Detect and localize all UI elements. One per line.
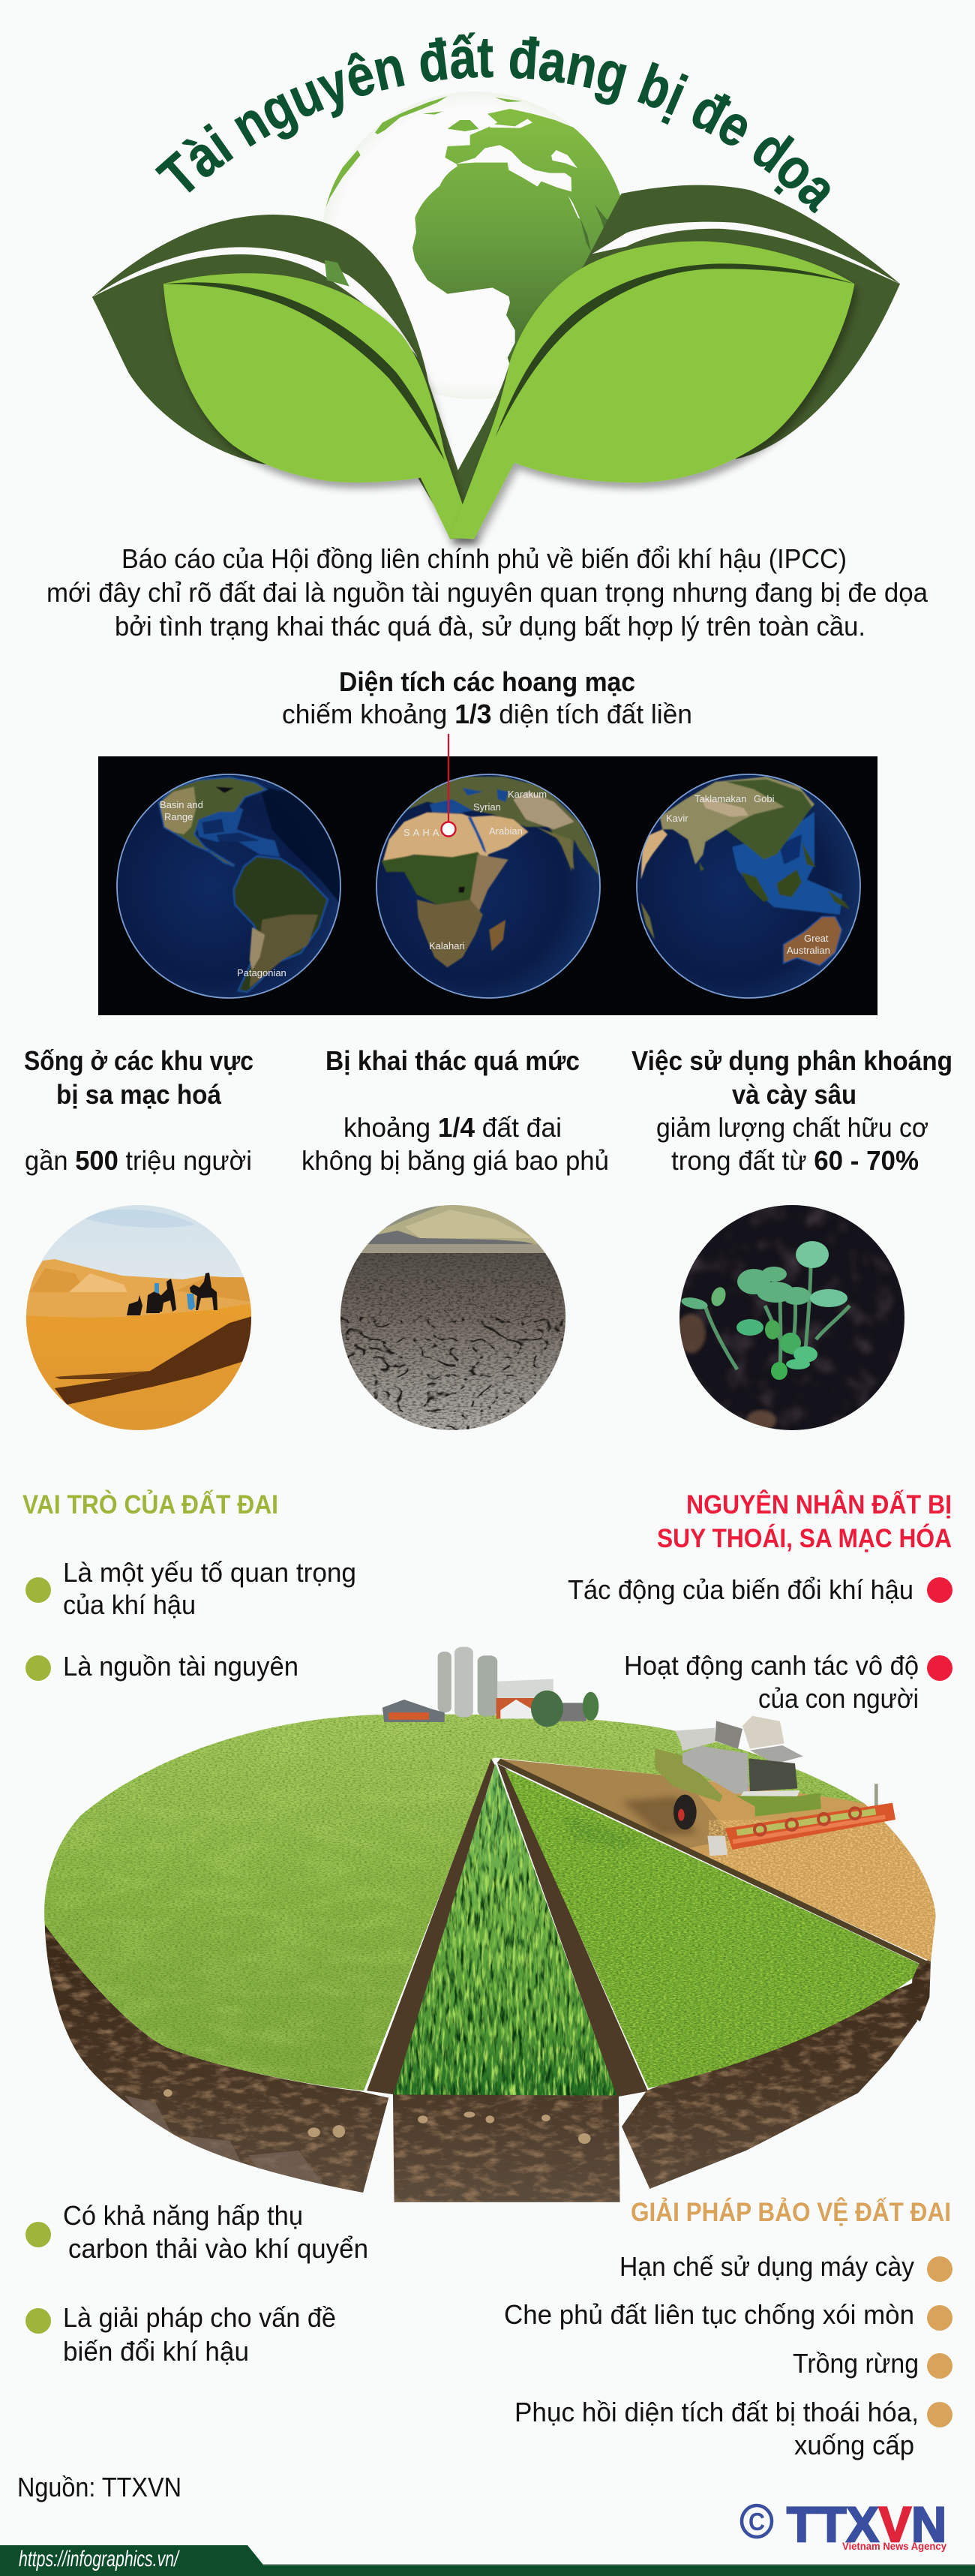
photo: cracked dry earth bbox=[338, 1201, 570, 1433]
globe labels: Kavir bbox=[666, 813, 688, 824]
heading: role of land: VAI TRÒ CỦA ĐẤT ĐAI bbox=[22, 1489, 278, 1519]
logo: TTXVN: C bbox=[748, 2508, 765, 2535]
column: fertilizer and deep ploughing: giảm lượng chất hữu cơ bbox=[656, 1112, 928, 1143]
globe labels: Kalahari bbox=[429, 940, 465, 951]
list: solutions: Hạn chế sử dụng máy cày bbox=[620, 2251, 914, 2282]
intro text block: Báo cáo của Hội đồng liên chính phủ về biến đổi khí hậu (IPCC) bbox=[122, 543, 847, 574]
wedge dividers bbox=[367, 1759, 648, 2097]
globe labels: Range bbox=[164, 811, 193, 822]
column: overexploited: Bị khai thác quá mức bbox=[326, 1045, 580, 1076]
leaf pair bbox=[92, 185, 900, 539]
tan sector edge bbox=[499, 1761, 926, 1964]
globe labels: Patagonian bbox=[237, 967, 286, 978]
globe: Americas bbox=[117, 774, 340, 998]
intro text block bbox=[46, 543, 928, 642]
list: causes: Tác động của biến đổi khí hậu bbox=[568, 1574, 914, 1605]
globe: Africa and Asia bbox=[376, 774, 602, 998]
main grass sector bbox=[38, 1710, 877, 2093]
column: desertified areas: Sống ở các khu vực bbox=[24, 1045, 254, 1076]
list: solutions: Phục hồi diện tích đất bị thoái hóa, bbox=[514, 2397, 919, 2427]
globe labels bbox=[160, 799, 286, 978]
photo: desert caravan bbox=[22, 1201, 255, 1435]
footer band: https://infographics.vn/ bbox=[19, 2547, 180, 2571]
intro text block: bởi tình trạng khai thác quá đà, sử dụng bất hợp lý trên toàn cầu. bbox=[115, 611, 866, 642]
list: solutions: xuống cấp bbox=[794, 2430, 914, 2460]
globe fragment over left leaf bbox=[325, 260, 350, 287]
farm buildings and silos bbox=[382, 1647, 598, 1727]
harvested wheat sector bbox=[497, 1756, 939, 1966]
list: solutions bbox=[504, 2251, 952, 2460]
list: role of land, lower items: Có khả năng hấp thụ bbox=[63, 2200, 303, 2231]
globe labels: Australian bbox=[787, 945, 830, 956]
column: desertified areas: gần 500 triệu người bbox=[25, 1145, 252, 1176]
right leaf vein bbox=[496, 263, 854, 437]
heading: causes of degradation bbox=[657, 1489, 952, 1553]
list: role of land, upper items: Là một yếu tố quan trọng bbox=[63, 1557, 356, 1588]
left leaf vein bbox=[164, 282, 445, 460]
hero illustration: globe and leaves bbox=[92, 92, 900, 539]
list: solutions: Che phủ đất liên tục chống xói mòn bbox=[504, 2299, 914, 2330]
white gap on left leaf bbox=[92, 247, 418, 358]
heading: causes of degradation: SUY THOÁI, SA MẠC HÓA bbox=[657, 1523, 952, 1553]
globe labels: Syrian bbox=[473, 801, 501, 813]
column: overexploited bbox=[302, 1045, 609, 1176]
globe labels: Karakum bbox=[508, 789, 547, 800]
column: fertilizer and deep ploughing: trong đất từ 60 - 70% bbox=[671, 1145, 919, 1176]
wheat sector bbox=[392, 1758, 622, 2098]
column: fertilizer and deep ploughing: và cày sâu bbox=[732, 1079, 856, 1110]
logo: TTXVN: TTXVN bbox=[787, 2496, 946, 2552]
globe: Asia and Australia bbox=[637, 774, 860, 998]
source: Nguồn: TTXVN bbox=[17, 2472, 182, 2502]
right grass sector bbox=[503, 1768, 926, 2093]
heading: desert area: Diện tích các hoang mạc bbox=[339, 666, 635, 697]
heading: desert area: chiếm khoảng 1/3 diện tích đất liền bbox=[282, 699, 692, 729]
icon: dark back leaf left bbox=[92, 215, 474, 538]
soil layers bbox=[38, 1921, 939, 2208]
list: role of land, upper items: Là nguồn tài nguyên bbox=[63, 1651, 298, 1682]
marker: Sahara pointer bbox=[441, 734, 456, 836]
illustration: combine harvester bbox=[655, 1716, 896, 1856]
panel: three earth globes bbox=[98, 756, 878, 1015]
intro text block: mới đây chỉ rõ đất đai là nguồn tài nguyên quan trọng nhưng đang bị đe dọa bbox=[46, 577, 928, 608]
list: causes: của con người bbox=[758, 1683, 919, 1714]
logo: TTXVN: Vietnam News Agency bbox=[842, 2540, 946, 2552]
caravan silhouettes bbox=[127, 1273, 218, 1315]
icon: light leaf left bbox=[164, 273, 474, 539]
heading: causes of degradation: NGUYÊN NHÂN ĐẤT BỊ bbox=[686, 1489, 952, 1519]
list: solutions: Trồng rừng bbox=[793, 2348, 919, 2379]
column: fertilizer and deep ploughing bbox=[632, 1045, 952, 1176]
icon: dark back leaf right bbox=[450, 185, 900, 538]
photo: seedling on dark soil bbox=[675, 1201, 909, 1435]
list: role of land, upper items bbox=[26, 1557, 356, 1682]
icon: globe bbox=[321, 92, 640, 399]
list: causes: Hoạt động canh tác vô độ bbox=[624, 1650, 919, 1681]
column: desertified areas bbox=[24, 1045, 254, 1176]
heading: desert area bbox=[282, 666, 692, 729]
pebbles bbox=[164, 2089, 591, 2144]
column: fertilizer and deep ploughing: Việc sử dụng phân khoáng bbox=[632, 1045, 952, 1076]
icon: light leaf right bbox=[450, 242, 854, 539]
globe labels: Arabian bbox=[489, 825, 523, 837]
white gap on right leaf bbox=[592, 222, 900, 284]
list: role of land, lower items bbox=[26, 2200, 368, 2367]
illustration: farmland pie cross-section bbox=[38, 1647, 939, 2208]
globe labels: Gobi bbox=[754, 793, 775, 804]
globe labels bbox=[666, 793, 830, 956]
column: overexploited: không bị băng giá bao phủ bbox=[302, 1145, 609, 1176]
list: causes bbox=[568, 1574, 952, 1714]
footer band bbox=[0, 2545, 975, 2576]
list: role of land, upper items: của khí hậu bbox=[63, 1589, 196, 1620]
globe labels: Basin and bbox=[160, 799, 203, 810]
globe labels bbox=[404, 789, 547, 951]
column: desertified areas: bị sa mạc hoá bbox=[56, 1079, 222, 1110]
title: Tài nguyên đất đang bị đe dọa bbox=[154, 32, 830, 213]
globe labels: Taklamakan bbox=[694, 793, 746, 804]
globe labels: Great bbox=[804, 933, 829, 944]
globe labels: SAHAR bbox=[404, 827, 452, 838]
list: role of land, lower items: biến đổi khí hậu bbox=[63, 2336, 249, 2367]
column: overexploited: khoảng 1/4 đất đai bbox=[344, 1112, 562, 1143]
list: role of land, lower items: Là giải pháp cho vấn đề bbox=[63, 2302, 336, 2333]
list: role of land, lower items: carbon thải vào khí quyển bbox=[68, 2233, 368, 2264]
